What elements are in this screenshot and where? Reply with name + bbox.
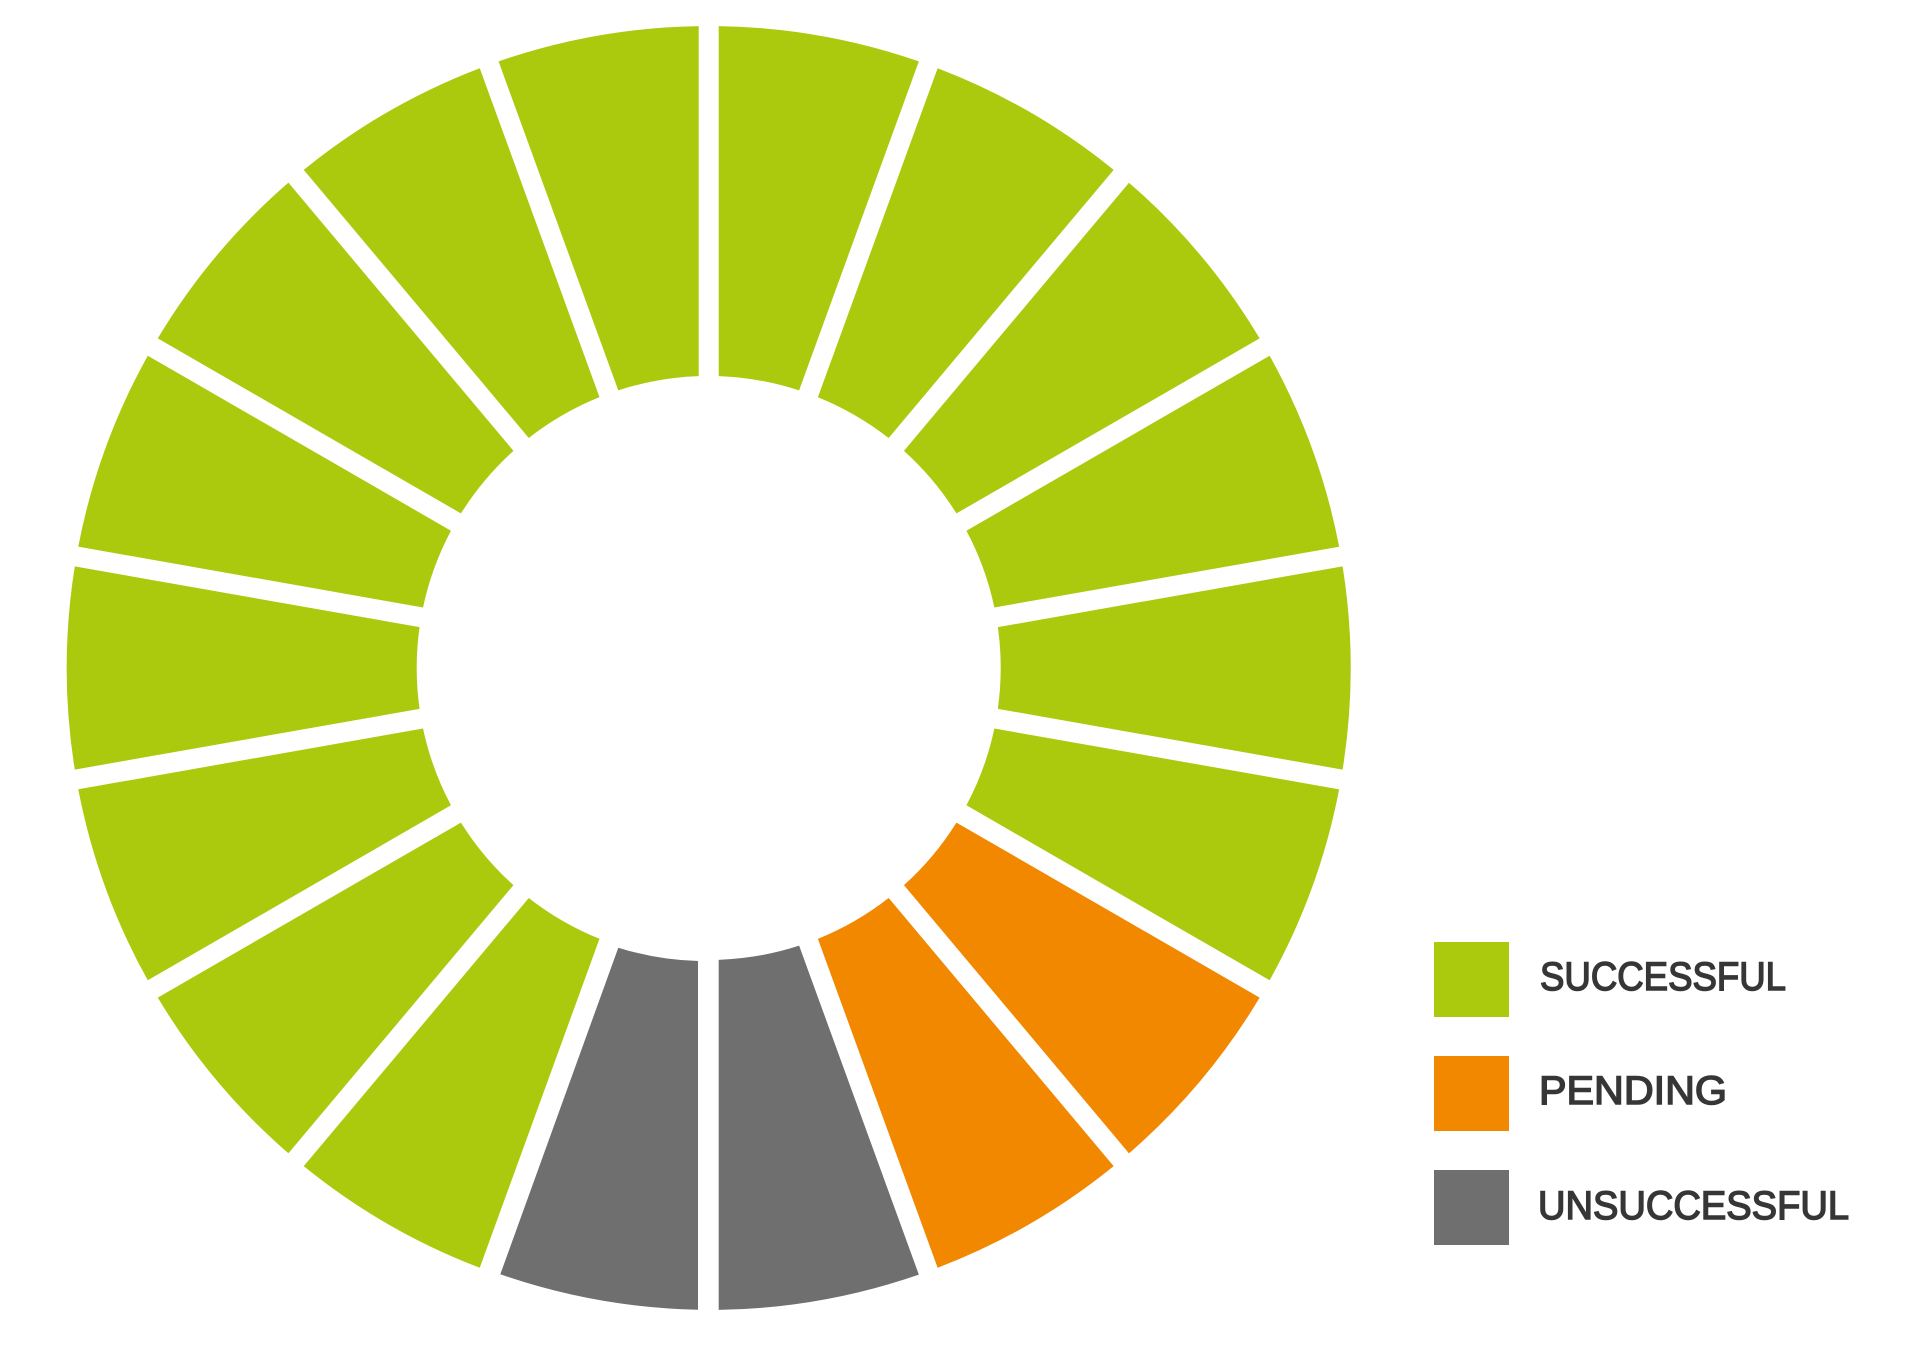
segment 11: successful (292, 857, 604, 1268)
label: unsuccessful: UNSUCCESSFUL (1538, 1184, 1849, 1228)
swatch: unsuccessful (1434, 1170, 1509, 1245)
segment 2: successful (813, 68, 1126, 479)
segment 8: pending (726, 887, 1114, 1295)
segment 15: successful (78, 350, 472, 610)
segment 14: successful (40, 509, 434, 770)
donut chart (40, 0, 1377, 1343)
segment 9: unsuccessful (606, 932, 919, 1343)
segment 5: successful (984, 566, 1377, 827)
legend item: pending (1434, 1056, 1727, 1131)
segment 13: successful (48, 625, 463, 980)
legend item: successful (1434, 942, 1786, 1017)
segment 3: successful (895, 183, 1282, 590)
segment 17: successful (304, 41, 691, 449)
legend (1434, 942, 1849, 1245)
segment 4: successful (954, 356, 1370, 711)
swatch: pending (1434, 1056, 1509, 1131)
label: successful: SUCCESSFUL (1540, 955, 1786, 999)
label: pending: PENDING (1539, 1069, 1727, 1113)
swatch: successful (1434, 942, 1509, 1017)
segment 1: successful (719, 26, 919, 390)
segment 16: successful (158, 165, 573, 521)
segment 10: unsuccessful (500, 948, 698, 1310)
segment 6: successful (946, 726, 1339, 986)
segment 12: successful (135, 746, 523, 1153)
segment 18: successful (499, 0, 811, 404)
segment 7: pending (844, 815, 1260, 1171)
legend item: unsuccessful (1434, 1170, 1849, 1245)
